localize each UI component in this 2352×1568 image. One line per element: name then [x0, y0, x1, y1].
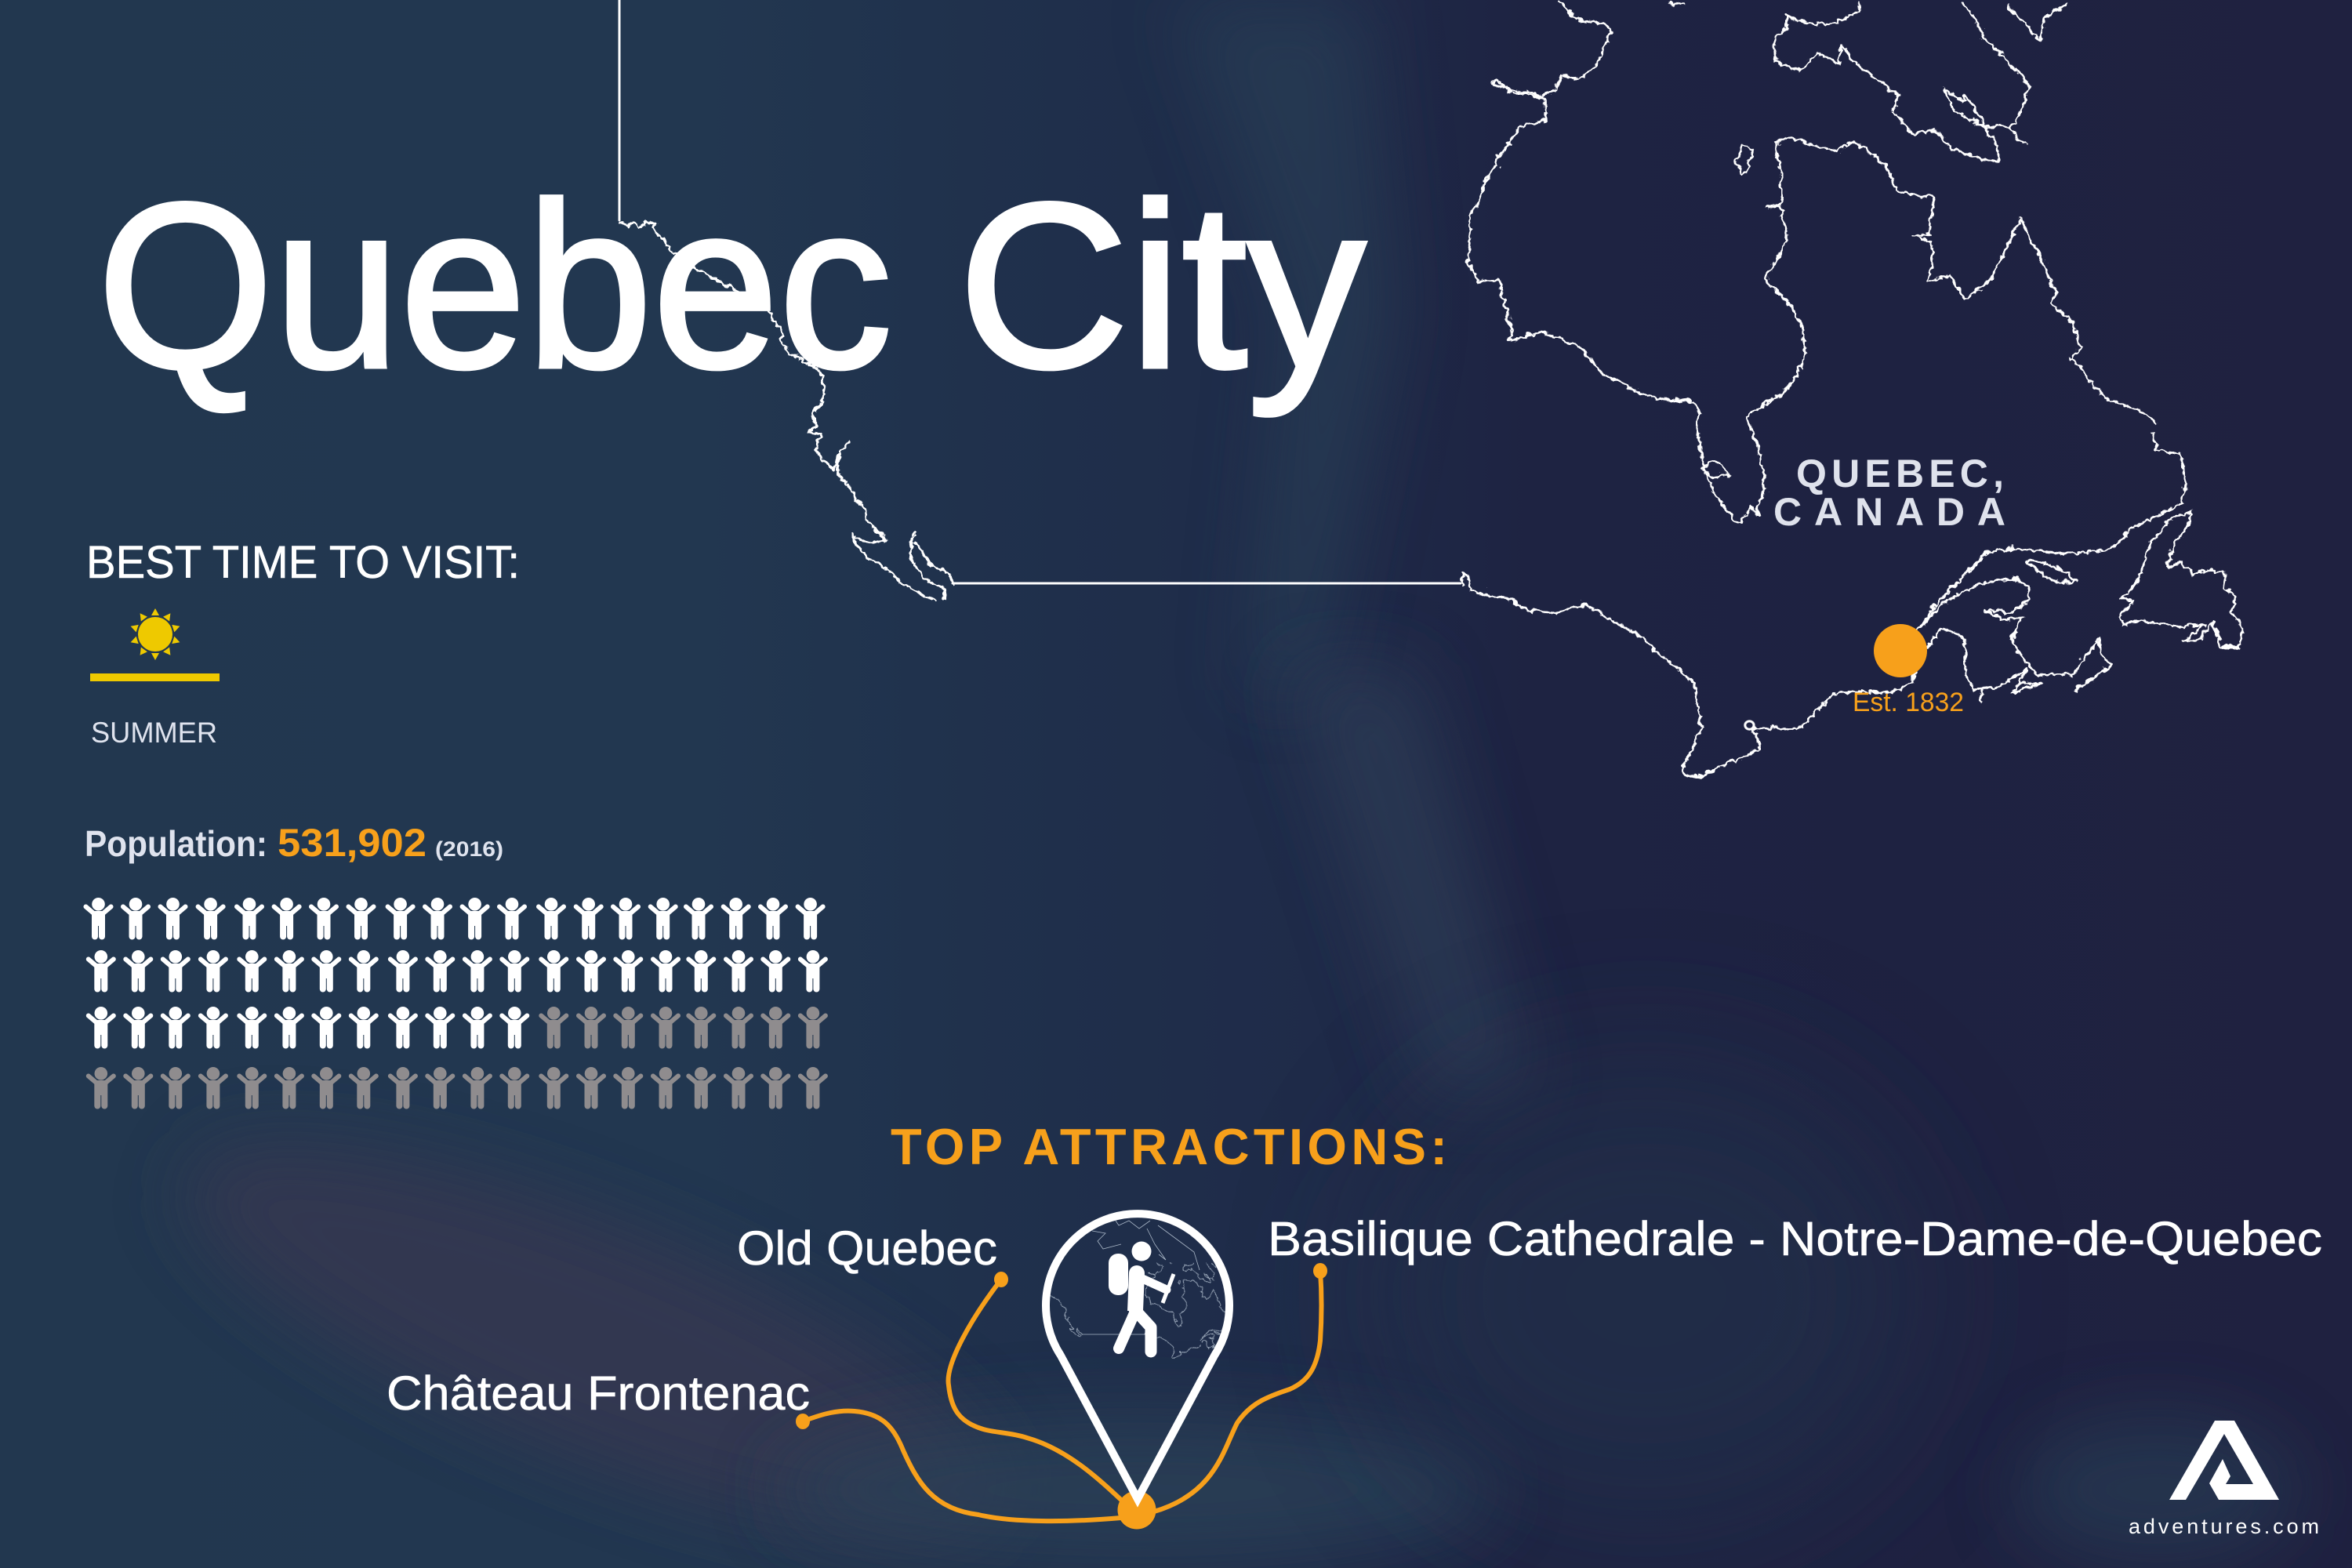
title: [97, 154, 1366, 419]
map label: Quebec, Canada: QUEBEC,: [1796, 452, 2004, 495]
map label: Quebec, Canada: CANADA: [1773, 490, 2005, 534]
title: Quebec: [97, 154, 892, 417]
route: Old Quebec: [949, 1274, 1123, 1501]
population label: [85, 821, 503, 865]
pictogram row 4: [89, 1067, 826, 1109]
heading: best time to visit: BEST TIME TO VISIT:: [86, 537, 520, 588]
pictogram row 3: [89, 1007, 826, 1049]
map marker: Quebec City: [1874, 624, 1927, 677]
map label: Quebec, Canada: [1773, 452, 2005, 534]
panel: population: [85, 821, 826, 1109]
panel: best time to visit: [86, 537, 520, 749]
icon: hiker: [1109, 1242, 1174, 1352]
population label: 531,902: [278, 821, 426, 865]
pin mini map: [1051, 1220, 1225, 1359]
label: Old Quebec: Old Quebec: [737, 1221, 997, 1275]
panel: top attractions: [387, 1118, 2322, 1529]
population label: Population:: [85, 823, 267, 864]
label: Basilique: Basilique Cathedrale - Notre-Dame-de-Quebec: [1268, 1212, 2322, 1265]
route: Basilique: [1154, 1265, 1325, 1512]
label: Chateau Frontenac: Château Frontenac: [387, 1367, 810, 1420]
icon: sun: [129, 608, 181, 660]
logo mark: [2169, 1421, 2279, 1500]
pictogram row 2: [89, 950, 826, 993]
marker label: established: Est. 1832: [1853, 688, 1964, 717]
season label: SUMMER: [91, 717, 217, 749]
title: City: [958, 154, 1366, 419]
logo: adventures.com: [2129, 1421, 2319, 1538]
map: outline of Canada: [619, 0, 2241, 775]
pictogram row 1: [86, 898, 823, 939]
route: Chateau Frontenac: [798, 1411, 1121, 1521]
population label: (2016): [435, 837, 503, 861]
pin outline: [1046, 1214, 1229, 1499]
logo wordmark: adventures.com: [2129, 1515, 2319, 1538]
route node: [1118, 1491, 1156, 1529]
season bar: [90, 673, 220, 681]
heading: top attractions: TOP ATTRACTIONS:: [891, 1118, 1447, 1175]
